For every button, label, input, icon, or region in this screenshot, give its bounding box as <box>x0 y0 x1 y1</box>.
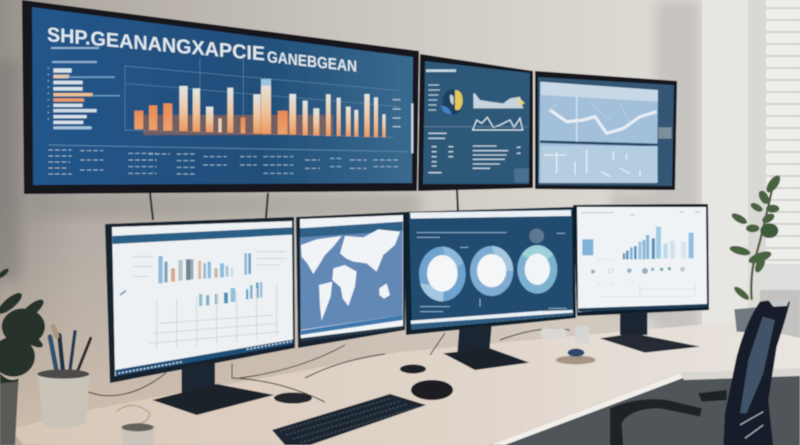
window with blinds <box>748 0 800 350</box>
small cup on desk <box>116 405 155 445</box>
lower monitor 3: radial charts <box>404 207 576 335</box>
header strip <box>541 82 658 102</box>
donut chart <box>441 89 463 115</box>
lower panel lines <box>597 259 695 297</box>
lower monitor 2: world map <box>296 212 406 348</box>
radial chart 3 <box>517 245 557 294</box>
mouse on pad <box>556 349 596 364</box>
orange and white column chart <box>134 79 386 137</box>
stand under lower monitor 4 <box>600 312 700 353</box>
computer mouse <box>411 380 453 400</box>
pens <box>50 327 91 375</box>
taskbar <box>578 304 707 312</box>
continents <box>301 229 400 321</box>
table of figures under chart <box>48 145 408 174</box>
armrest <box>610 399 702 445</box>
pen pot <box>37 327 91 428</box>
small icons row <box>591 267 685 274</box>
divider bar <box>540 142 658 145</box>
top monitor 2: mixed dashboard <box>418 54 533 191</box>
radial chart 2 <box>470 246 513 296</box>
heading <box>582 212 700 215</box>
bar chart 2 <box>199 282 262 306</box>
keyboard <box>272 394 426 445</box>
radial chart 1 <box>419 247 466 301</box>
title text <box>47 24 357 76</box>
column chart <box>623 227 694 259</box>
area charts <box>473 93 525 130</box>
lower panel <box>541 146 658 183</box>
map ocean <box>300 222 403 330</box>
bar chart 1 <box>158 253 251 283</box>
cables behind top screens <box>150 190 458 220</box>
chart grid <box>125 57 400 137</box>
right scale ticks <box>393 99 413 153</box>
top and bottom readouts <box>417 233 567 312</box>
taskbar <box>301 320 403 338</box>
stand under lower monitor 3 <box>443 325 529 370</box>
potted plant right <box>729 173 783 333</box>
small round device left <box>400 364 426 374</box>
top bar <box>410 210 571 219</box>
subtitle lines <box>51 47 99 63</box>
lower monitor 1: spreadsheet dashboard <box>105 217 295 383</box>
dashboard heading <box>426 69 456 72</box>
desk front edge and underside <box>10 368 800 445</box>
top monitor 1: main analytics wall screen <box>22 0 419 194</box>
taskbar <box>115 339 293 376</box>
lower monitor 4: bright dashboard <box>573 204 709 316</box>
small tile <box>582 239 593 255</box>
small round device by keyboard <box>274 392 312 404</box>
chair back <box>723 300 790 445</box>
title text: GANEBGEAN <box>267 48 357 76</box>
top monitor 3: line chart screen <box>535 71 677 190</box>
lower table <box>428 133 521 173</box>
potted plant left <box>0 267 47 445</box>
title bar <box>112 227 292 244</box>
office chair <box>610 300 790 445</box>
title text: SHP.GEANANGXAPCIE <box>47 24 265 66</box>
pot <box>37 371 90 428</box>
horizontal bar list <box>48 68 120 129</box>
line chart <box>547 97 657 142</box>
taskbar <box>411 310 573 329</box>
data table <box>133 252 287 350</box>
stand under lower monitor 1 <box>152 362 274 415</box>
desk cables <box>88 329 570 402</box>
cup of mug by lower monitor 4 <box>540 326 589 343</box>
desk surface <box>10 322 800 445</box>
plant pot <box>734 300 773 333</box>
legend lines <box>428 85 440 110</box>
